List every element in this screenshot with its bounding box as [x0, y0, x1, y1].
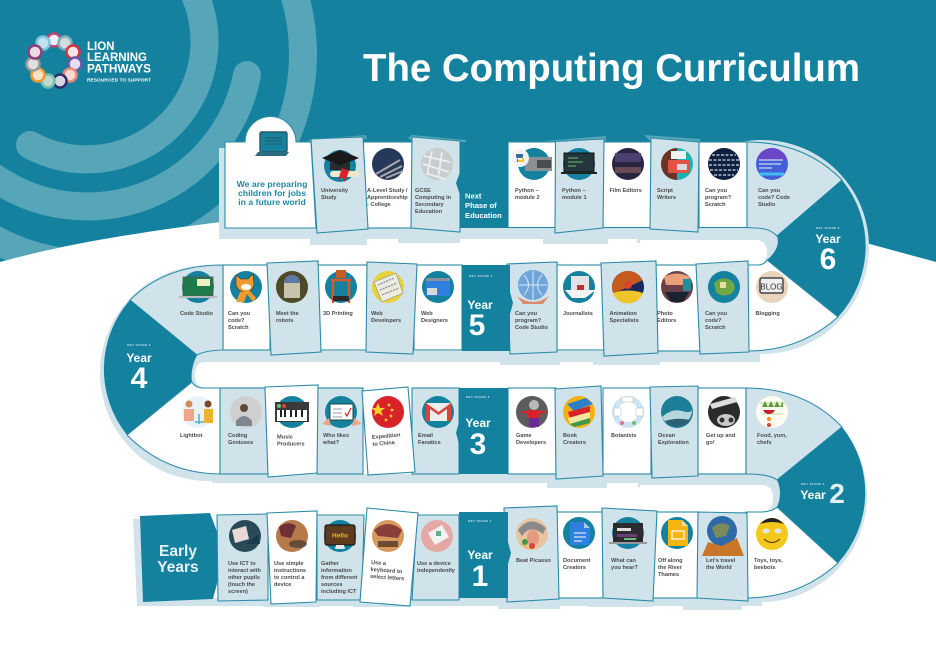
panel: What can you hear?: you hear?	[611, 565, 638, 571]
panel: Use a keyboard to select letters: Use a	[371, 560, 386, 567]
panel: Coding Geniuses: Coding	[228, 433, 247, 439]
panel: Use a device independently: Use a device	[417, 561, 451, 567]
panel: Off along the River Thames	[651, 512, 698, 598]
panel: Journalists: Journalists	[563, 311, 593, 317]
panel: 3D Printing	[318, 265, 367, 350]
panel: Music Producers: Music	[277, 434, 293, 440]
panel: Blogging: Blogging	[756, 311, 780, 317]
panel: Let's travel the World: the World	[706, 565, 732, 571]
panel: Film Editors: Film Editors	[610, 188, 642, 194]
panel: Next Phase of Education	[456, 142, 508, 228]
panel: Year 3: Year	[465, 416, 491, 430]
panel: University Study	[311, 137, 368, 233]
panel: Python module 2	[508, 142, 556, 228]
panel: Food, yum, chefs	[746, 388, 842, 480]
panel: GCSE: GCSE	[415, 188, 431, 194]
panel: Meet the robots: Meet the	[276, 311, 299, 317]
panel: Can you code? Scratch (row 2): Can you	[228, 311, 250, 317]
panel: Python module 1: Python –	[562, 188, 586, 194]
panel: Gather information: information	[321, 568, 352, 574]
panel: Script Writers	[650, 138, 699, 232]
panel: Gather information: Gather	[321, 561, 339, 567]
panel: Book Creators	[555, 386, 603, 479]
panel: Photo Editors: Editors	[657, 318, 676, 324]
panel: Off along the River Thames: the River	[658, 565, 683, 571]
panel: future world heading card	[225, 117, 316, 228]
panel: Web Designers	[414, 265, 462, 350]
panel: Email Fanatics: Fanatics	[418, 440, 441, 446]
logo: PATHWAYS	[87, 64, 151, 76]
panel: Expedition to China	[362, 387, 415, 475]
panel: Year 6 wedge: 6	[820, 243, 836, 276]
panel: Early Years: Early	[159, 543, 197, 560]
panel: Use ICT to interact: (touch the	[228, 582, 255, 588]
panel: Use simple instructions: device	[274, 582, 291, 588]
panel: GCSE	[411, 137, 460, 232]
panel: Game Developers: Developers	[516, 440, 546, 446]
panel: Year 4 wedge	[104, 300, 197, 435]
panel: Year 3: KEY STAGE 2	[466, 395, 490, 399]
panel: Toys, toys, beebots	[746, 507, 838, 598]
panel: Early Years	[140, 513, 225, 602]
panel: Document Creators: Creators	[563, 565, 586, 571]
panel: Can you code? Code Studio (Year 6): code? Code	[758, 195, 790, 201]
panel: Web Developers: Developers	[371, 318, 401, 324]
panel: Can you code? Scratch (row 2)	[223, 265, 270, 350]
panel: Off along the River Thames: Thames	[658, 572, 679, 578]
panel: Toys, toys, beebots: beebots	[754, 565, 775, 571]
panel: Photo Editors	[652, 265, 700, 351]
panel: Can you program? Scratch: Can you	[705, 188, 727, 194]
panel: Can you code? Scratch (right): Scratch	[705, 325, 726, 331]
title: The Computing Curriculum	[363, 47, 860, 90]
panel: Can you code? Code Studio (Year 6): Studio	[758, 202, 776, 208]
panel: Use ICT to interact	[217, 514, 268, 601]
panel: Beat Picasso: Beat Picasso	[516, 558, 551, 564]
panel: Year 2 wedge: Year	[800, 488, 826, 502]
panel: Ocean Exploration: Ocean	[658, 433, 675, 439]
panel: Can you program? Scratch: Scratch	[705, 202, 726, 208]
panel: Can you program? Code Studio (row 2): program?	[515, 318, 542, 324]
panel: Photo Editors: Photo	[657, 311, 673, 317]
panel: Can you program? Scratch	[699, 142, 747, 228]
panel: Animation Specialists	[601, 261, 658, 356]
panel: Year 1: 1	[472, 560, 488, 593]
panel: Year 1: KEY STAGE 1	[468, 519, 492, 523]
panel: Year 4 wedge: 4	[131, 362, 148, 395]
panel: Use a keyboard to select letters: select letters	[370, 574, 404, 582]
panel: Next Phase of Education: Phase of	[465, 201, 497, 210]
panel: Web Designers: Web	[421, 311, 433, 317]
background swirl	[0, 0, 303, 264]
panel: Lightbot: Lightbot	[180, 433, 203, 439]
panel: A-Level: - College	[367, 202, 391, 208]
panel: Game Developers	[508, 388, 556, 474]
panel: Get up and go!	[698, 388, 746, 474]
panel: Blogging: BLOG	[760, 282, 783, 292]
panel: Next Phase of Education: Education	[465, 211, 502, 220]
logo: RESOURCED TO SUPPORT	[87, 78, 151, 84]
panel: Year 6 wedge: Year	[815, 232, 841, 246]
panel: Year 5: KEY STAGE 2	[469, 274, 493, 278]
panel: Off along the River Thames: Off along	[658, 558, 683, 564]
panel: GCSE: Secondary	[415, 202, 444, 208]
panel: Use simple instructions: instructions	[274, 568, 306, 574]
logo	[26, 34, 151, 88]
panel: Year 6 wedge: KEY STAGE 2	[816, 226, 840, 230]
panel: Can you code? Scratch (row 2): code?	[228, 318, 245, 324]
panel: Year 5: 5	[469, 309, 485, 342]
panel: Food, yum, chefs: chefs	[757, 440, 772, 446]
panel: Ocean Exploration	[650, 386, 698, 478]
panel: Food, yum, chefs: Food, yum,	[757, 433, 787, 439]
panel: Who likes what?: what?	[322, 440, 340, 446]
panel: What can you hear?: What can	[611, 558, 636, 564]
header background wave	[0, 0, 936, 262]
panel: Year 2 wedge	[777, 427, 865, 563]
panel: Expedition to China: to China	[372, 440, 396, 448]
panel: Email Fanatics	[412, 388, 459, 474]
panel: Year 1: Year	[467, 548, 493, 562]
panel: Use a keyboard to select letters	[360, 508, 418, 606]
panel: Meet the robots	[267, 261, 321, 355]
panel: Code Studio (row 2): Code Studio	[180, 311, 214, 317]
panel: Can you code? Scratch (right): code?	[705, 318, 722, 324]
panel: Use simple instructions: Use simple	[274, 561, 304, 567]
panel: Year 6 wedge	[767, 180, 866, 317]
panel: Web Developers: Web	[371, 311, 383, 317]
panel: Lightbot	[127, 382, 220, 474]
panel: Gather information	[317, 515, 364, 600]
panel: Ocean Exploration: Exploration	[658, 440, 689, 446]
panel: Gather information: from different	[321, 575, 357, 581]
top accents on tilted cards	[307, 135, 700, 144]
panel: Document Creators	[556, 512, 603, 598]
icon: laptop	[255, 132, 289, 156]
panel: Use simple instructions	[267, 511, 317, 604]
panel: Let's travel the World	[697, 512, 748, 601]
panel: future world heading card: in a future world	[238, 197, 306, 207]
panel: future world heading card: children for jobs	[238, 188, 306, 198]
panel: Let's travel the World: Let's travel	[706, 558, 735, 564]
panel: Game Developers: Game	[516, 433, 532, 439]
panel: Gather information: Hello	[332, 532, 348, 540]
panel: Python module 2: module 2	[515, 195, 540, 201]
panel: Can you program? Scratch: program?	[705, 195, 732, 201]
panel: A-Level: A-Level Study /	[367, 188, 407, 194]
panel: Script Writers: Writers	[657, 195, 676, 201]
panel: Python module 1: module 1	[562, 195, 587, 201]
panel: Email Fanatics: Email	[418, 433, 433, 439]
panel: Animation Specialists: Animation	[610, 311, 637, 317]
panel: Coding Geniuses	[220, 388, 268, 474]
panel: Use a device independently: independently	[417, 568, 456, 574]
panel: Year 2 wedge: KEY STAGE 1	[801, 482, 825, 486]
panel: Year 5: Year	[467, 298, 493, 312]
panel: Year 4 wedge: Year	[126, 351, 152, 365]
panel: Can you code? Code Studio (Year 6)	[747, 142, 842, 236]
panel: Botanists: Botanists	[611, 433, 636, 439]
panel: GCSE: Education	[415, 209, 443, 215]
panel: University Study: Study	[321, 195, 337, 201]
panel: Year 3: 3	[470, 428, 486, 461]
panel: Use ICT to interact: other pupils	[228, 575, 260, 581]
panel: Year 2 wedge: 2	[829, 478, 845, 509]
panel: Get up and go!: go!	[706, 440, 715, 446]
panel: Can you code? Scratch (right)	[696, 261, 749, 354]
panel: Year 1	[459, 512, 511, 598]
panel: Journalists	[557, 265, 604, 350]
panel: Use a device independently	[412, 515, 459, 600]
panel: Web Developers	[366, 262, 417, 354]
panel: Use simple instructions: to control a	[274, 575, 305, 581]
logo: LION	[87, 41, 114, 53]
panel: Year 4 wedge: KEY STAGE 2	[127, 343, 151, 347]
panel: Early Years: Years	[157, 559, 199, 576]
panel: A-Level: Apprenticeship	[367, 195, 408, 201]
panel: Python module 2: Python –	[515, 188, 539, 194]
panel: Get up and go!: Get up and	[706, 433, 735, 439]
panel: Can you program? Code Studio (row 2)	[507, 262, 557, 354]
panel: Can you code? Code Studio (Year 6): Can you	[758, 188, 780, 194]
panel: Can you code? Scratch (right): Can you	[705, 311, 727, 317]
panel: Toys, toys, beebots: Toys, toys,	[754, 558, 783, 564]
panel: Gather information: sources	[321, 582, 342, 588]
panel: Year 3	[456, 388, 508, 474]
panel: 3D Printing: 3D Printing	[323, 311, 353, 317]
panel: Music Producers	[265, 385, 318, 477]
panel: Use ICT to interact: Use ICT to	[228, 561, 256, 567]
panel: University Study: University	[321, 188, 348, 194]
panel: What can you hear?	[602, 508, 657, 601]
panel: Coding Geniuses: Geniuses	[228, 440, 253, 446]
panel: Can you program? Code Studio (row 2): Code Studio	[515, 325, 549, 331]
panel: Gather information: including ICT	[321, 589, 357, 595]
panel: future world heading card: We are preparing	[237, 179, 307, 189]
panel: Book Creators: Creators	[563, 440, 586, 446]
panel: Web Designers: Designers	[421, 318, 448, 324]
panel: Use ICT to interact: interact with	[228, 568, 262, 574]
panel: GCSE: Computing in	[415, 195, 452, 201]
panel: Next Phase of Education: Next	[465, 192, 482, 200]
panel: Meet the robots: robots	[276, 318, 293, 324]
panel: Use ICT to interact: screen)	[228, 589, 248, 595]
track gaps	[195, 240, 773, 512]
panel: Document Creators: Document	[563, 558, 590, 564]
track shadows	[100, 140, 869, 610]
panel: Expedition to China: Expedition	[372, 433, 401, 441]
panel: Blogging	[748, 260, 838, 351]
panel: Can you code? Scratch (row 2): Scratch	[228, 325, 249, 331]
panel: Who likes what?: Who likes	[323, 433, 349, 439]
panel: Can you program? Code Studio (row 2): Can you	[515, 311, 537, 317]
panel: Beat Picasso	[504, 506, 559, 602]
panel: Book Creators: Book	[563, 433, 577, 439]
panel: Film Editors	[603, 142, 651, 228]
panel: Code Studio (row 2)	[130, 265, 223, 355]
panel: A-Level	[362, 142, 412, 228]
panel: Who likes what?	[317, 388, 363, 474]
logo: LEARNING	[87, 52, 147, 64]
panel: Year 5	[462, 265, 513, 351]
panel: Script Writers: Script	[657, 188, 673, 194]
panel: Animation Specialists: Specialists	[610, 318, 639, 324]
panel: Use a keyboard to select letters: keyboard to	[370, 567, 403, 575]
panel: Python module 1	[555, 139, 604, 233]
panel: Botanists	[603, 388, 651, 474]
panel: Music Producers: Producers	[277, 442, 305, 448]
